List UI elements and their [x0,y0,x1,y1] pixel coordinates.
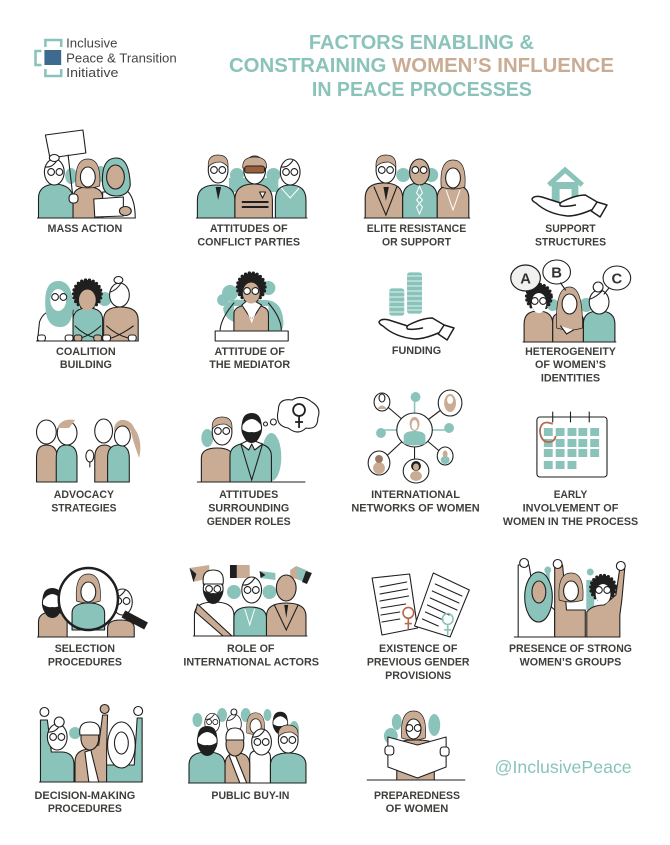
illustration: three people raising hands [39,704,143,782]
label [535,223,606,249]
panel: attitudes surrounding gender roles [197,397,319,528]
diagram: network of women [368,390,462,483]
logo [36,35,177,80]
illustration: three women with linked arms [37,276,138,341]
label: WOMEN’S GROUPS [520,656,621,669]
panel: public buy-in [189,708,306,802]
label [503,489,638,528]
label: ELITE RESISTANCE [367,223,466,235]
logo wordmark: Initiative [66,65,118,80]
panel: existence of previous gender provisions [367,573,470,682]
label: STRATEGIES [51,502,116,515]
label: THE MEDIATOR [209,359,291,371]
label: PROCEDURES [48,656,122,669]
icon: coins above open hand [379,272,454,340]
label: PREPAREDNESS [374,790,460,802]
label [374,790,460,815]
panel: selection procedures [38,568,146,669]
label: WOMEN IN THE PROCESS [503,516,638,528]
illustration: three figures below flags [190,565,312,636]
label: PROCEDURES [48,803,122,815]
label: MASS ACTION [48,223,122,235]
illustration: three women with speech bubbles A B C [511,260,631,342]
illustration: three protesters with placard [38,130,135,218]
illustration: magnifying glass over a woman [38,568,146,637]
panel: presence of strong women's groups [509,558,632,669]
label: STRUCTURES [535,236,606,249]
social handle: @InclusivePeace [494,757,632,777]
panel: preparedness of women [367,711,465,815]
label [183,643,319,669]
label: PROVISIONS [385,670,451,682]
panel: coalition building [37,276,138,371]
label: INTERNATIONAL [371,489,460,501]
label: HETEROGENEITY [525,346,616,358]
icon: two documents with female symbols [372,573,469,637]
label: PUBLIC BUY-IN [211,790,289,802]
illustration: three women raising fists [514,558,625,637]
logo wordmark: Inclusive [66,35,117,51]
label: ATTITUDES [219,489,278,501]
icon: house on open hand [532,170,607,217]
illustration: mediator at podium [215,273,288,341]
title: FACTORS ENABLING & [309,32,534,54]
label: INVOLVEMENT OF [523,502,619,515]
title: IN PEACE PROCESSES [312,79,532,101]
illustration: woman reading a document [367,711,465,780]
label [197,223,300,249]
illustration: two men thinking of a woman [197,397,319,482]
logo wordmark: Peace & Transition [66,50,177,66]
panel: international networks of women [351,390,480,515]
label: SUPPORT [545,223,596,235]
panel: elite resistance or support [364,155,470,249]
label: EXISTENCE OF [379,643,458,655]
label: ATTITUDE OF [215,346,285,358]
label: PREVIOUS GENDER [367,656,470,669]
panel: support structures [532,170,607,249]
label [367,643,470,682]
label: PRESENCE OF STRONG [509,643,632,655]
illustration: crowd of people [189,708,306,783]
panel: funding [379,272,454,357]
panel: role of international actors [183,565,319,669]
panel: advocacy strategies [37,419,140,515]
label: BUILDING [60,359,112,371]
illustration: three women with speech bubbles A B C: A [520,271,531,288]
label: COALITION [56,346,116,358]
illustration: three women with speech bubbles A B C: B [551,265,562,282]
label [56,346,116,371]
illustration: three officials [364,155,470,218]
title [229,32,614,101]
panel: attitude of the mediator [209,273,291,371]
panel: mass action [38,130,135,235]
illustration: three figures with soldier [196,155,307,218]
label [51,489,116,515]
label [525,346,616,385]
logo mark [36,40,61,76]
panel: heterogeneity of women's identities [511,260,631,385]
panel: attitudes of conflict parties [196,155,307,249]
label: ROLE OF [227,643,275,655]
illustration: three women with speech bubbles A B C: C [612,271,622,288]
label: ATTITUDES OF [210,223,288,235]
title: CONSTRAINING WOMEN’S INFLUENCE [229,55,614,77]
illustration: two pairs of people talking [37,419,140,482]
label: NETWORKS OF WOMEN [351,502,480,515]
panel: early involvement of women in the process [503,412,638,528]
label: CONFLICT PARTIES [197,236,300,249]
label: EARLY [554,489,587,501]
label [367,223,466,249]
panel: decision-making procedures [35,704,143,815]
label [207,489,291,528]
icon: calendar with circled first date [537,412,607,477]
label [35,790,135,815]
label [351,489,480,515]
label: DECISION-MAKING [35,790,135,802]
label: ADVOCACY [54,489,114,501]
label: FUNDING [392,345,441,357]
label: OF WOMEN’S [535,359,606,371]
label: SELECTION [55,643,115,655]
label: OF WOMEN [386,803,448,815]
label [48,643,122,669]
label: IDENTITIES [541,372,600,385]
label [209,346,291,371]
label: GENDER ROLES [207,516,291,528]
label: INTERNATIONAL ACTORS [183,656,319,669]
label: SURROUNDING [208,502,289,515]
logo wordmark [66,35,177,80]
label: OR SUPPORT [382,236,452,249]
label [509,643,632,669]
